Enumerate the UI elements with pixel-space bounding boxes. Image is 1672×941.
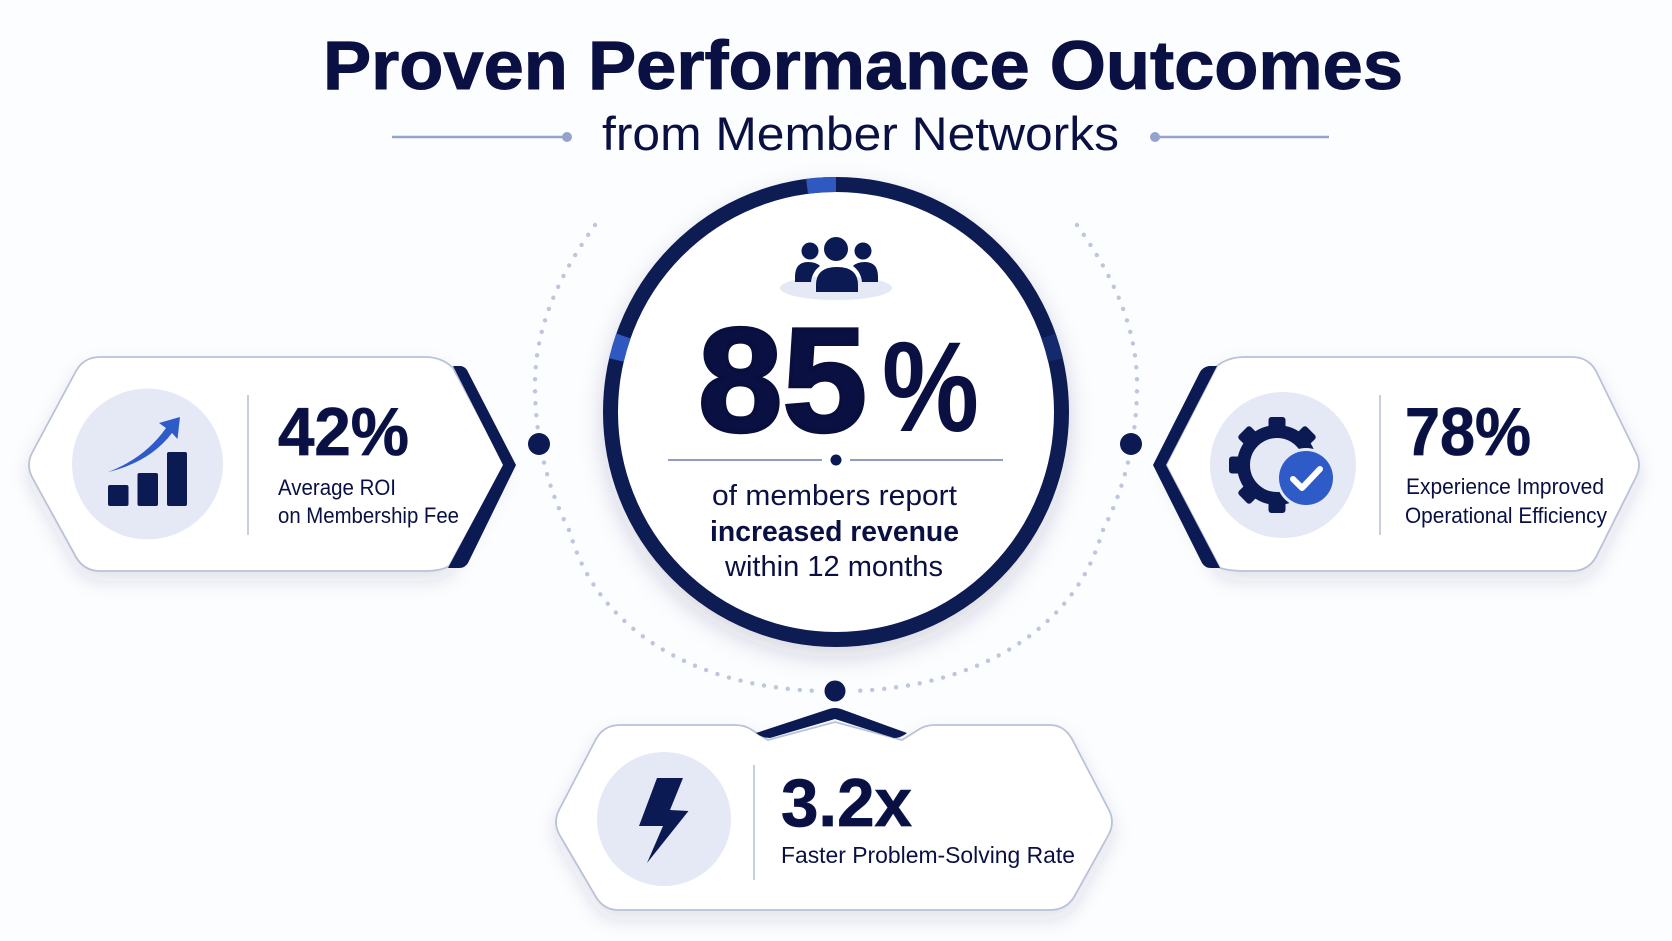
label: on Membership Fee bbox=[278, 503, 459, 528]
chevron bbox=[1153, 366, 1220, 568]
connector dot: left bbox=[528, 433, 550, 455]
label bbox=[278, 475, 459, 528]
dotted orbit: right bbox=[850, 225, 1137, 691]
label: Average ROI bbox=[278, 475, 396, 500]
panel: central 85% circle bbox=[610, 184, 1062, 640]
central description: increased revenue bbox=[710, 516, 959, 548]
central description bbox=[710, 480, 959, 583]
card shape bbox=[29, 357, 505, 571]
stat 78%: 78% bbox=[1405, 394, 1531, 470]
inner divider bbox=[668, 454, 1003, 466]
label: Experience Improved bbox=[1406, 474, 1604, 499]
stat 3.2x: 3.2x bbox=[781, 765, 912, 841]
chevron bbox=[448, 366, 516, 568]
ring bbox=[610, 184, 1062, 640]
central description: within 12 months bbox=[724, 551, 943, 583]
icon: people bbox=[780, 237, 892, 300]
panel: 3.2x problem-solving card bbox=[556, 708, 1112, 910]
divider bbox=[753, 765, 755, 880]
card shape bbox=[1166, 357, 1639, 571]
big number 85%: 85 bbox=[698, 298, 867, 463]
icon: rising bar chart bbox=[72, 388, 223, 540]
label: Faster Problem-Solving Rate bbox=[781, 842, 1075, 868]
title: Proven Performance Outcomes bbox=[323, 27, 1403, 104]
subtitle with side rules: from Member Networks bbox=[602, 107, 1119, 160]
icon: lightning bolt bbox=[597, 752, 731, 886]
subtitle with side rules bbox=[392, 107, 1329, 160]
divider bbox=[1379, 395, 1381, 535]
central description: of members report bbox=[712, 480, 957, 512]
icon: gear with check bbox=[1210, 392, 1356, 538]
card shape bbox=[556, 722, 1112, 910]
label bbox=[1405, 474, 1607, 528]
chevron bbox=[756, 708, 907, 738]
big number 85%: % bbox=[882, 316, 979, 459]
dotted orbit: left bbox=[535, 225, 822, 691]
stat 42%: 42% bbox=[278, 394, 409, 470]
panel: 78% efficiency card bbox=[1153, 357, 1639, 571]
panel: 42% ROI card bbox=[29, 357, 516, 571]
big number 85% bbox=[698, 298, 979, 463]
divider bbox=[247, 395, 249, 535]
connector dot: bottom bbox=[824, 680, 846, 702]
connector dot: right bbox=[1120, 433, 1142, 455]
label: Operational Efficiency bbox=[1405, 503, 1607, 528]
